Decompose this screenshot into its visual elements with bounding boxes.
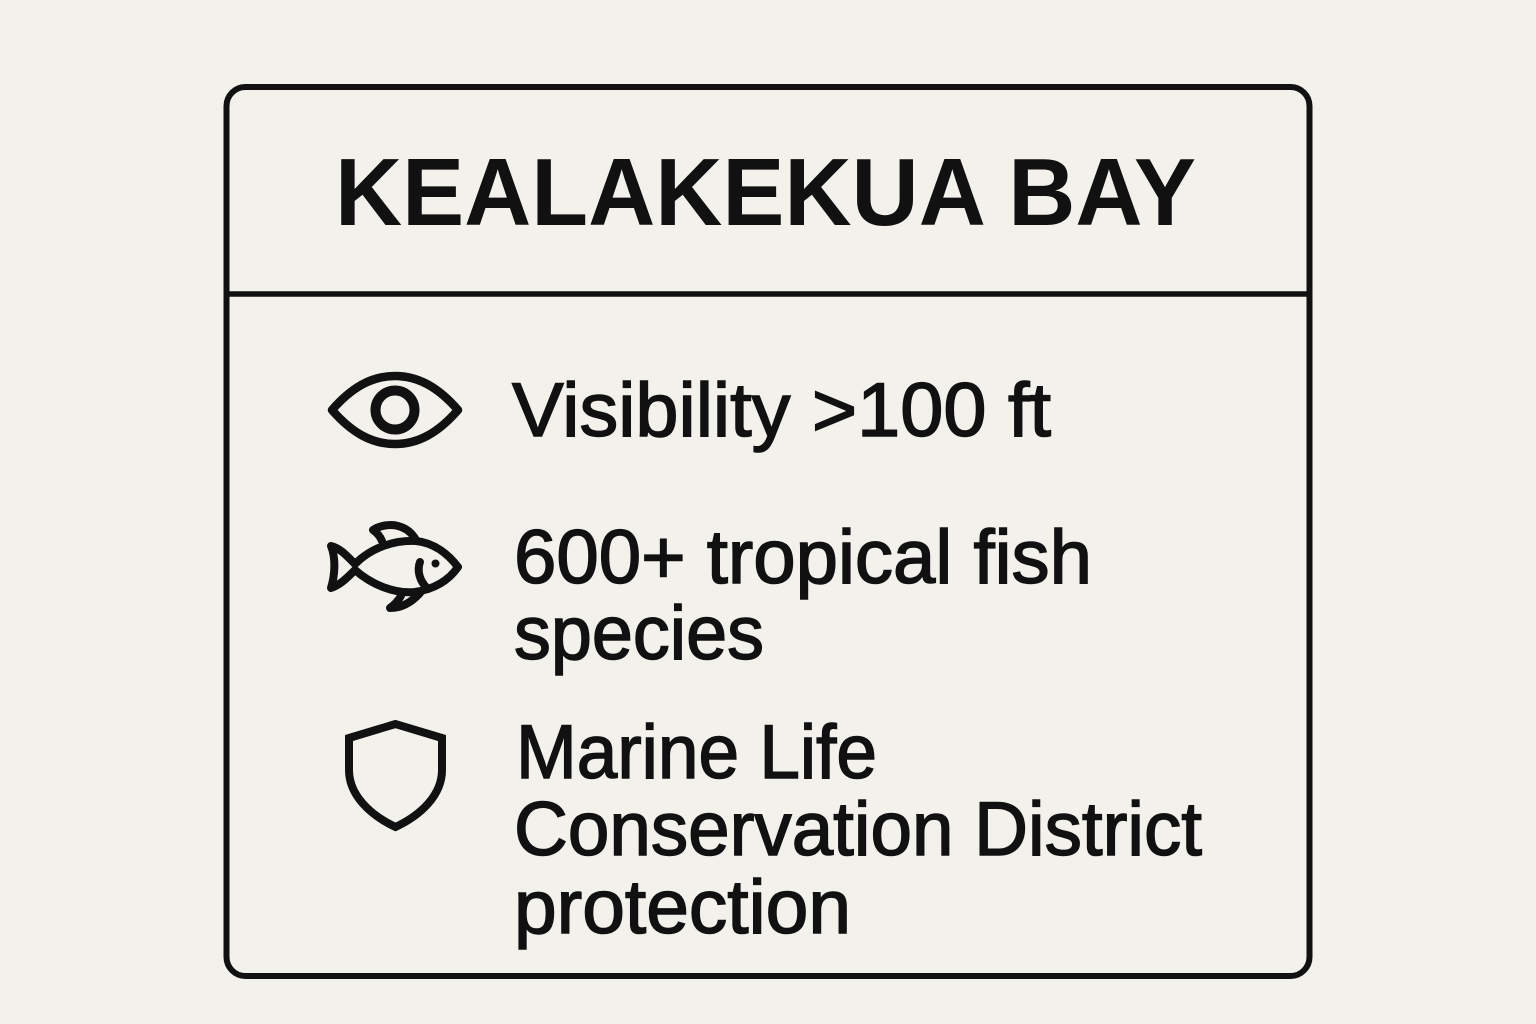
text: conservation protection: protection — [514, 865, 851, 950]
text: conservation protection: Marine Life — [516, 710, 877, 795]
row: visibility — [332, 368, 1051, 453]
row: conservation protection — [349, 710, 1202, 950]
row: fish species: species — [514, 591, 764, 676]
text: conservation protection: Conservation District — [514, 787, 1202, 872]
row: fish species — [331, 515, 1092, 676]
panel: info card — [226, 87, 1310, 976]
text: conservation protection — [514, 710, 1202, 950]
icon: eye — [332, 376, 458, 444]
icon: fish — [331, 525, 458, 608]
text: fish species: 600+ tropical fish — [514, 515, 1092, 600]
icon: shield — [349, 724, 442, 827]
title: KEALAKEKUA BAY — [335, 139, 1196, 246]
text: visibility: Visibility >100 ft — [512, 368, 1051, 453]
